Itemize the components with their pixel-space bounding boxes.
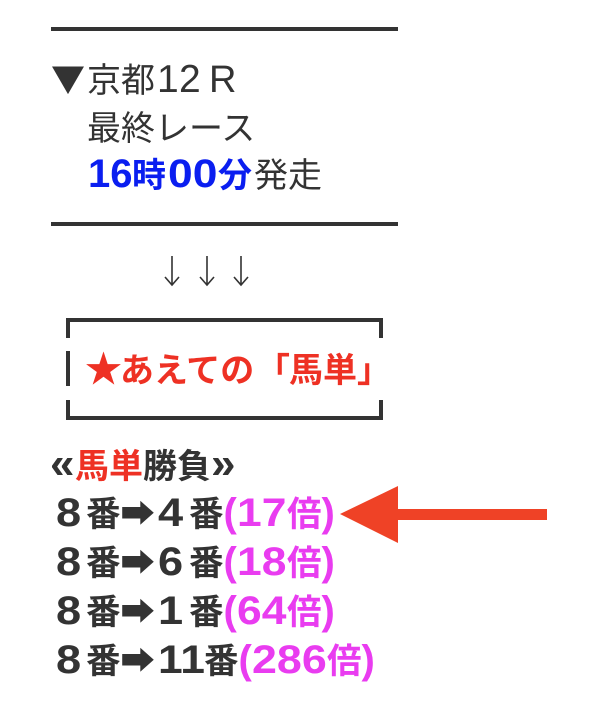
bet row 4: 11 xyxy=(158,638,205,682)
bet row 3: 番 xyxy=(86,594,120,632)
race heading: Kyoto 12R xyxy=(51,53,236,102)
bet row 2: ➡ xyxy=(120,545,155,583)
bet row 3: 倍 xyxy=(287,594,322,632)
bet row 4: ) xyxy=(362,638,375,682)
bet row 4: ➡ xyxy=(120,643,155,681)
bet row 1: ) xyxy=(322,491,335,535)
exacta section heading: » xyxy=(211,439,235,488)
race heading: Kyoto 12R: 2 xyxy=(179,58,201,101)
post time xyxy=(88,152,322,196)
bet row 1 xyxy=(56,491,335,535)
bet row 3: ( xyxy=(224,589,237,633)
bet row 2: 倍 xyxy=(287,545,322,583)
callout text: あえての xyxy=(120,352,254,390)
bet row 3: 8 xyxy=(56,589,81,633)
bet row 2 xyxy=(56,540,335,584)
bet row 1: ( xyxy=(224,491,237,535)
bet row 2: ( xyxy=(224,540,237,584)
bet row 1: 倍 xyxy=(287,496,322,534)
bet row 2: 8 xyxy=(56,540,81,584)
red arrow pointing at first bet xyxy=(340,486,547,543)
callout box: horse exacta pick xyxy=(66,318,391,420)
icon: three down arrows xyxy=(164,256,248,286)
post time: 発走 xyxy=(254,157,322,195)
race heading: Kyoto 12R: R xyxy=(209,59,236,101)
race heading: Kyoto 12R: 1 xyxy=(157,58,179,101)
callout text: 「 xyxy=(256,352,290,390)
callout text xyxy=(85,349,391,390)
bet row 2: 6 xyxy=(158,540,183,584)
bet row 4: 番 xyxy=(86,643,120,681)
bet row 4: 286 xyxy=(252,638,327,682)
bet row 4: 8 xyxy=(56,638,81,682)
bet row 3: ➡ xyxy=(120,594,155,632)
bet row 2: 番 xyxy=(189,545,224,583)
bet list xyxy=(56,491,375,682)
bet row 4: 番 xyxy=(204,643,238,681)
final race label: 最終レース xyxy=(87,110,255,148)
bet row 4: 倍 xyxy=(327,643,362,681)
bet row 3: 番 xyxy=(189,594,224,632)
bet row 1: 4 xyxy=(158,491,183,535)
bet row 4: ( xyxy=(238,638,252,682)
post time: 16 xyxy=(88,152,132,196)
bet row 3 xyxy=(56,589,335,633)
bet row 1: 17 xyxy=(237,491,286,535)
bet row 1: 番 xyxy=(86,496,120,534)
exacta section heading xyxy=(50,439,235,488)
race heading: Kyoto 12R: 京都 xyxy=(87,62,155,100)
bet row 1: 番 xyxy=(189,496,224,534)
bet row 1: 8 xyxy=(56,491,81,535)
post time: 00 xyxy=(168,152,217,196)
bet row 2: ) xyxy=(322,540,335,584)
callout text: 馬単」 xyxy=(289,352,391,390)
callout text: ★ xyxy=(85,349,122,390)
bet row 4 xyxy=(56,638,375,682)
bet row 3: 64 xyxy=(237,589,286,633)
exacta section heading: « xyxy=(50,439,74,488)
bet row 3: ) xyxy=(322,589,335,633)
bet row 2: 18 xyxy=(237,540,286,584)
bet row 1: ➡ xyxy=(120,496,155,534)
race heading: Kyoto 12R: ▼ xyxy=(51,53,85,102)
post time: 分 xyxy=(218,157,252,195)
post time: 時 xyxy=(132,157,166,195)
bet row 3: 1 xyxy=(158,589,183,633)
exacta section heading: 馬単勝負 xyxy=(75,448,211,486)
bet row 2: 番 xyxy=(86,545,120,583)
